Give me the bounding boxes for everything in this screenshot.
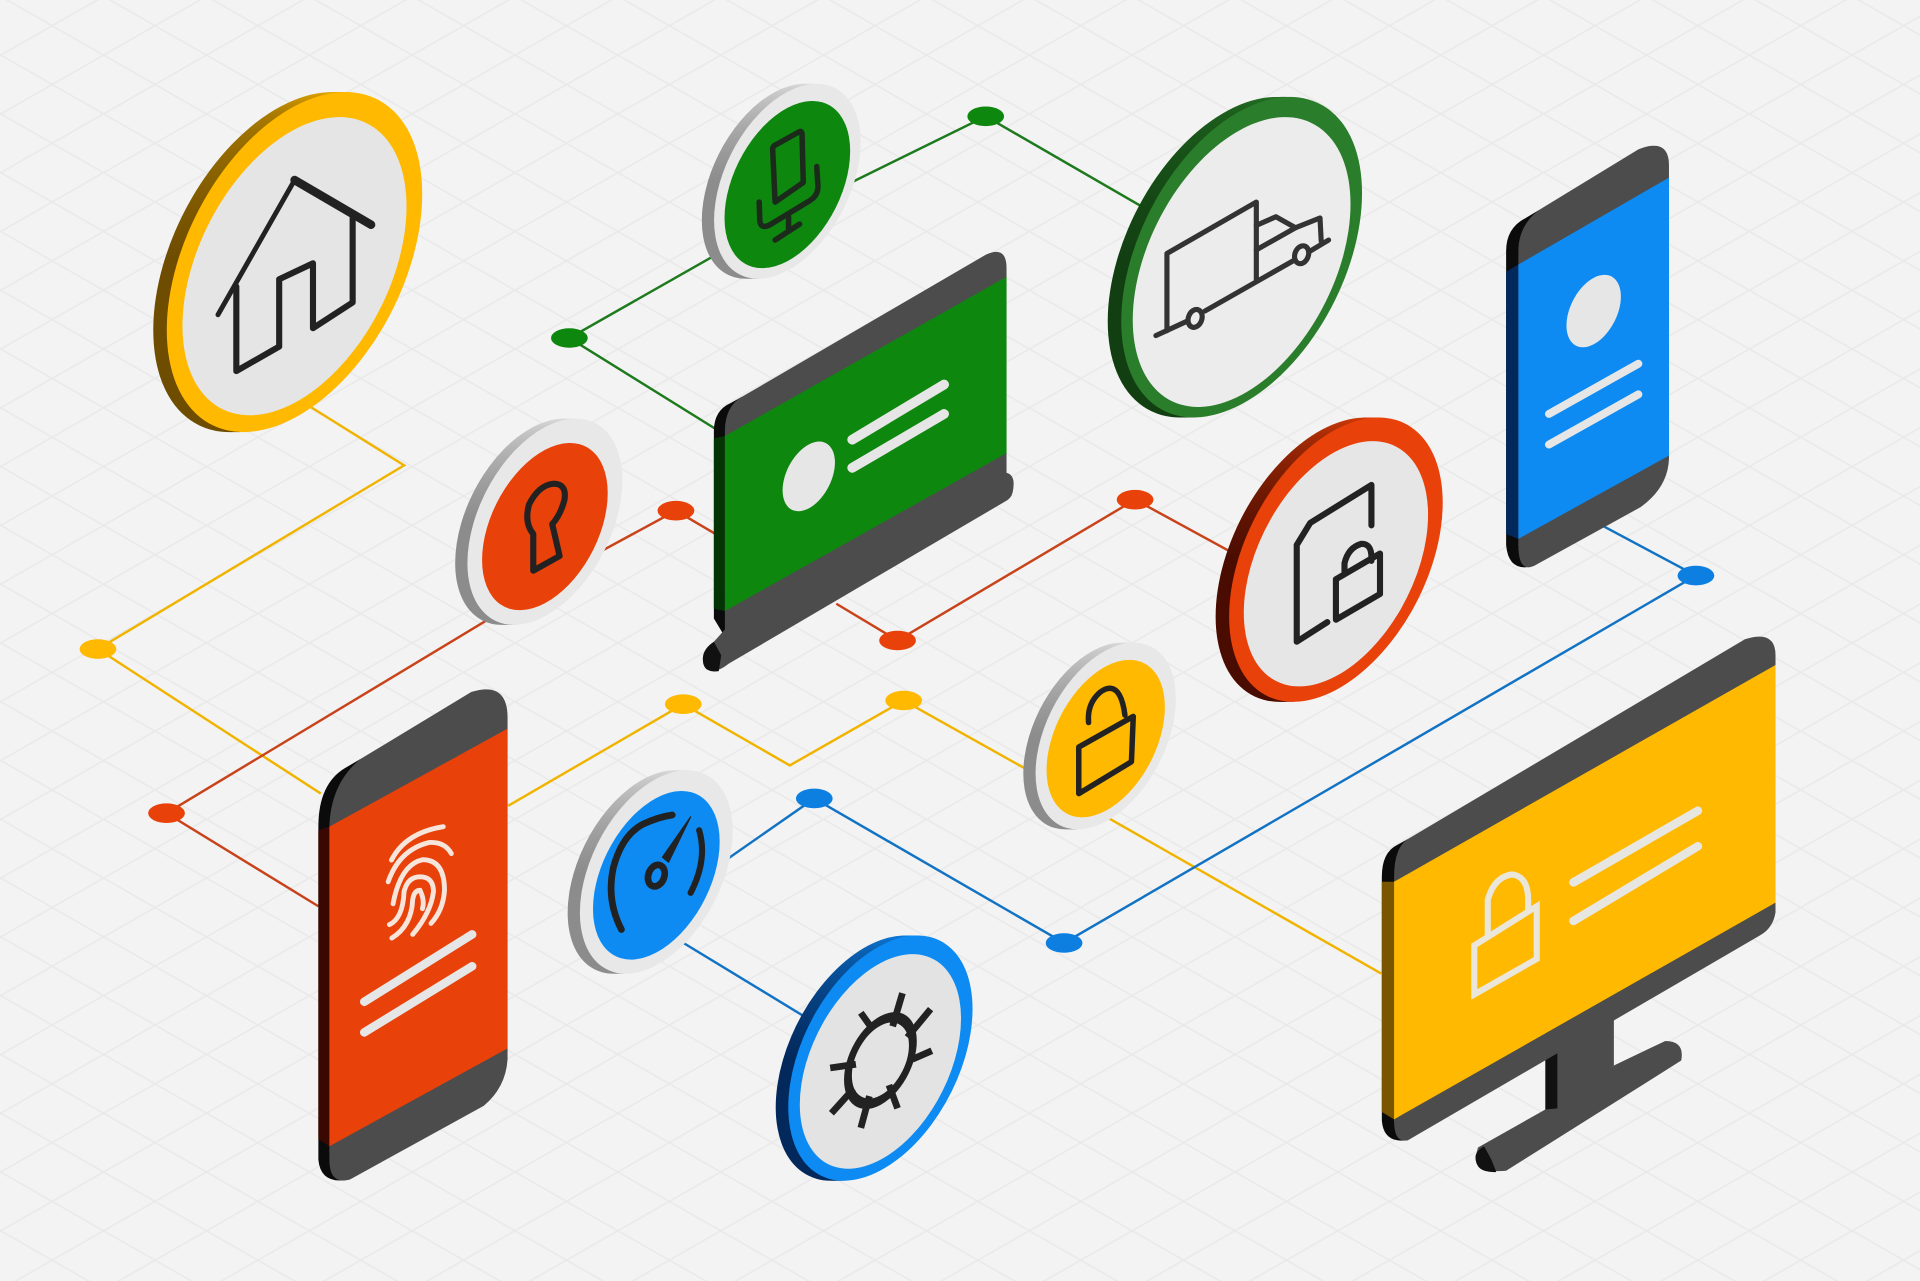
icon: keyhole	[527, 484, 565, 571]
connector nodes	[80, 107, 1714, 953]
icon: open padlock	[1079, 688, 1133, 794]
device: yellow desktop monitor	[1382, 637, 1776, 1172]
disc: keyhole icon	[455, 379, 622, 664]
disc: open padlock icon	[1023, 607, 1176, 865]
avatar circle	[783, 431, 835, 522]
disc: truck icon	[1108, 39, 1362, 475]
connectors: yellow lines	[98, 404, 1381, 974]
avatar circle	[1566, 263, 1621, 359]
icon: white padlock	[1474, 874, 1537, 994]
base bar	[703, 473, 1014, 671]
icon: speedometer	[611, 815, 702, 930]
connectors: green lines	[569, 116, 1151, 429]
connectors: blue lines	[673, 527, 1696, 1026]
icon: fingerprint	[388, 827, 451, 938]
disc: gear icon	[776, 890, 973, 1226]
red screen	[329, 729, 508, 1146]
disc: locked file icon	[1216, 365, 1443, 754]
disc: house icon	[153, 31, 422, 493]
text lines	[1549, 364, 1638, 445]
connectors: red lines	[167, 500, 1243, 906]
green screen	[725, 277, 1007, 611]
icon: microphone	[759, 131, 818, 240]
monitor stand	[1476, 1016, 1682, 1172]
icon: house	[218, 180, 371, 371]
text lines	[364, 934, 472, 1032]
text lines	[1573, 811, 1698, 921]
yellow screen	[1394, 665, 1776, 1119]
disc: microphone icon	[702, 46, 861, 316]
device: green laptop display	[703, 252, 1014, 671]
blue screen	[1518, 178, 1669, 539]
icon: truck	[1156, 202, 1329, 336]
text lines	[852, 385, 944, 468]
device: red phone	[318, 689, 508, 1181]
device: blue phone	[1506, 146, 1669, 567]
icon: file with padlock	[1297, 485, 1380, 642]
icon: gear	[830, 993, 932, 1128]
disc: gauge icon	[568, 732, 733, 1012]
